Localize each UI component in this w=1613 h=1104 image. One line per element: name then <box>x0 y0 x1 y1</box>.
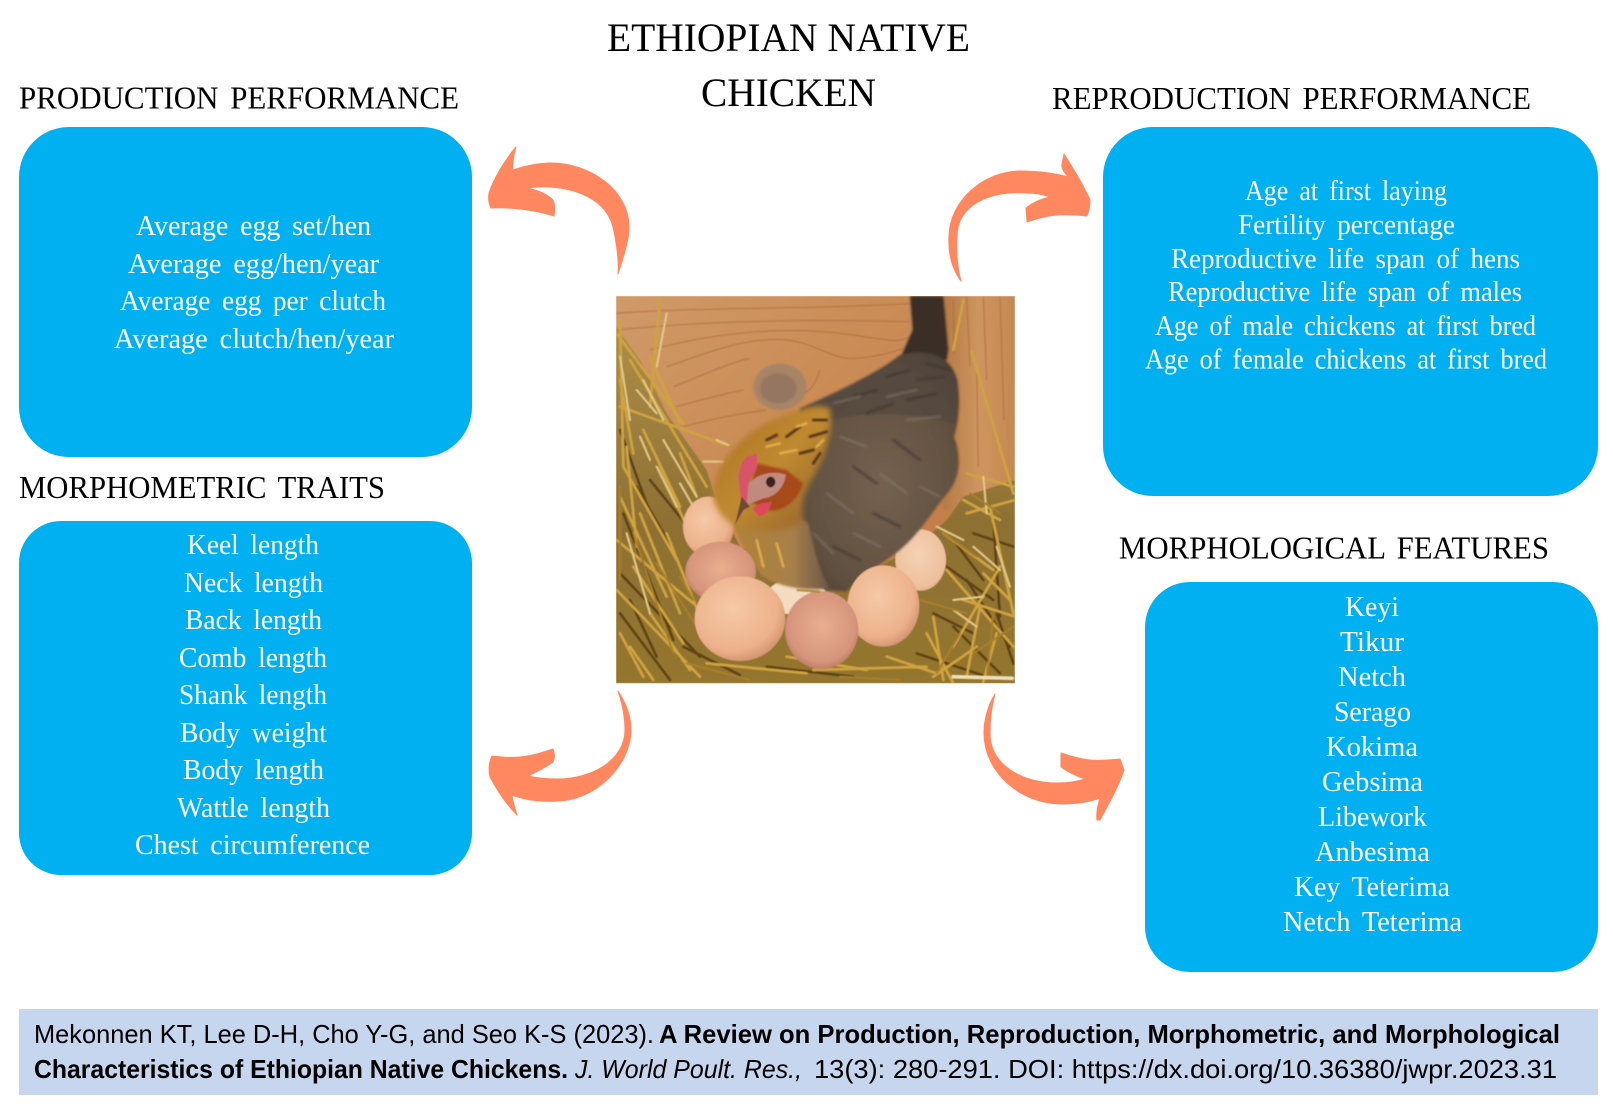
list: morphological items: Netch Teterima <box>1283 906 1462 938</box>
list: reproduction items: Reproductive life span of hens <box>1171 243 1520 275</box>
list: production items: Average clutch/hen/year <box>114 323 394 355</box>
panel: reproduction performance <box>1103 127 1598 496</box>
list: morphological items: Libework <box>1318 801 1427 833</box>
citation text: Characteristics of Ethiopian Native Chickens. <box>34 1054 568 1084</box>
citation text: J. World Poult. Res., <box>574 1054 802 1084</box>
list: morphometric items: Neck length <box>184 567 323 599</box>
citation text: 13(3): 280-291. DOI: https://dx.doi.org/10.36380/jwpr.2023.31 <box>814 1054 1557 1084</box>
arrow: to production performance <box>489 147 629 274</box>
list: reproduction items: Age of female chickens at first bred <box>1145 344 1547 376</box>
title: CHICKEN <box>701 70 876 115</box>
heading: production performance: PRODUCTION PERFORMANCE <box>19 80 459 116</box>
list: morphological items: Kokima <box>1326 731 1418 763</box>
list: morphological items <box>1283 591 1462 938</box>
list: production items <box>114 210 394 355</box>
citation text: Mekonnen KT, Lee D-H, Cho Y-G, and Seo K-S (2023). <box>34 1019 654 1049</box>
list: morphometric items: Shank length <box>179 679 327 711</box>
list: reproduction items: Fertility percentage <box>1238 209 1455 241</box>
arrow: to reproduction performance <box>949 154 1090 281</box>
title: ETHIOPIAN NATIVE <box>607 15 970 60</box>
list: morphological items: Keyi <box>1345 591 1399 623</box>
list: reproduction items: Reproductive life span of males <box>1168 276 1522 308</box>
list: morphometric items: Chest circumference <box>135 829 370 861</box>
heading: morphometric traits: MORPHOMETRIC TRAITS <box>19 470 385 505</box>
list: morphological items: Anbesima <box>1315 836 1430 868</box>
list: reproduction items: Age at first laying <box>1245 175 1447 207</box>
panel: morphometric traits <box>19 521 472 875</box>
citation text <box>34 1019 1560 1084</box>
list: production items: Average egg per clutch <box>120 285 386 317</box>
list: morphometric items: Back length <box>185 604 322 636</box>
list: morphometric items: Body weight <box>180 717 327 749</box>
list: reproduction items: Age of male chickens at first bred <box>1155 310 1536 342</box>
list: morphometric items: Wattle length <box>177 792 330 824</box>
list: reproduction items <box>1145 175 1547 376</box>
panel: morphological features <box>1145 582 1598 972</box>
list: morphometric items: Body length <box>183 754 324 786</box>
arrow: to morphological features <box>984 694 1124 820</box>
list: morphological items: Gebsima <box>1322 766 1423 798</box>
list: morphometric items <box>135 529 370 861</box>
title <box>607 15 970 115</box>
arrow: to morphometric traits <box>489 691 631 815</box>
list: production items: Average egg/hen/year <box>128 248 379 280</box>
panel: production performance <box>19 127 472 457</box>
photo: hen on eggs in straw nest <box>616 296 1015 683</box>
citation bar <box>19 1009 1598 1095</box>
list: morphometric items: Keel length <box>187 529 319 561</box>
heading: morphological features: MORPHOLOGICAL FEATURES <box>1119 530 1549 566</box>
list: morphometric items: Comb length <box>179 642 327 674</box>
heading: reproduction performance: REPRODUCTION PERFORMANCE <box>1052 81 1531 116</box>
list: morphological items: Serago <box>1334 696 1411 728</box>
list: production items: Average egg set/hen <box>136 210 371 242</box>
list: morphological items: Key Teterima <box>1294 871 1450 903</box>
list: morphological items: Netch <box>1338 661 1406 693</box>
list: morphological items: Tikur <box>1340 626 1404 658</box>
citation text: A Review on Production, Reproduction, Morphometric, and Morphological <box>659 1019 1560 1049</box>
